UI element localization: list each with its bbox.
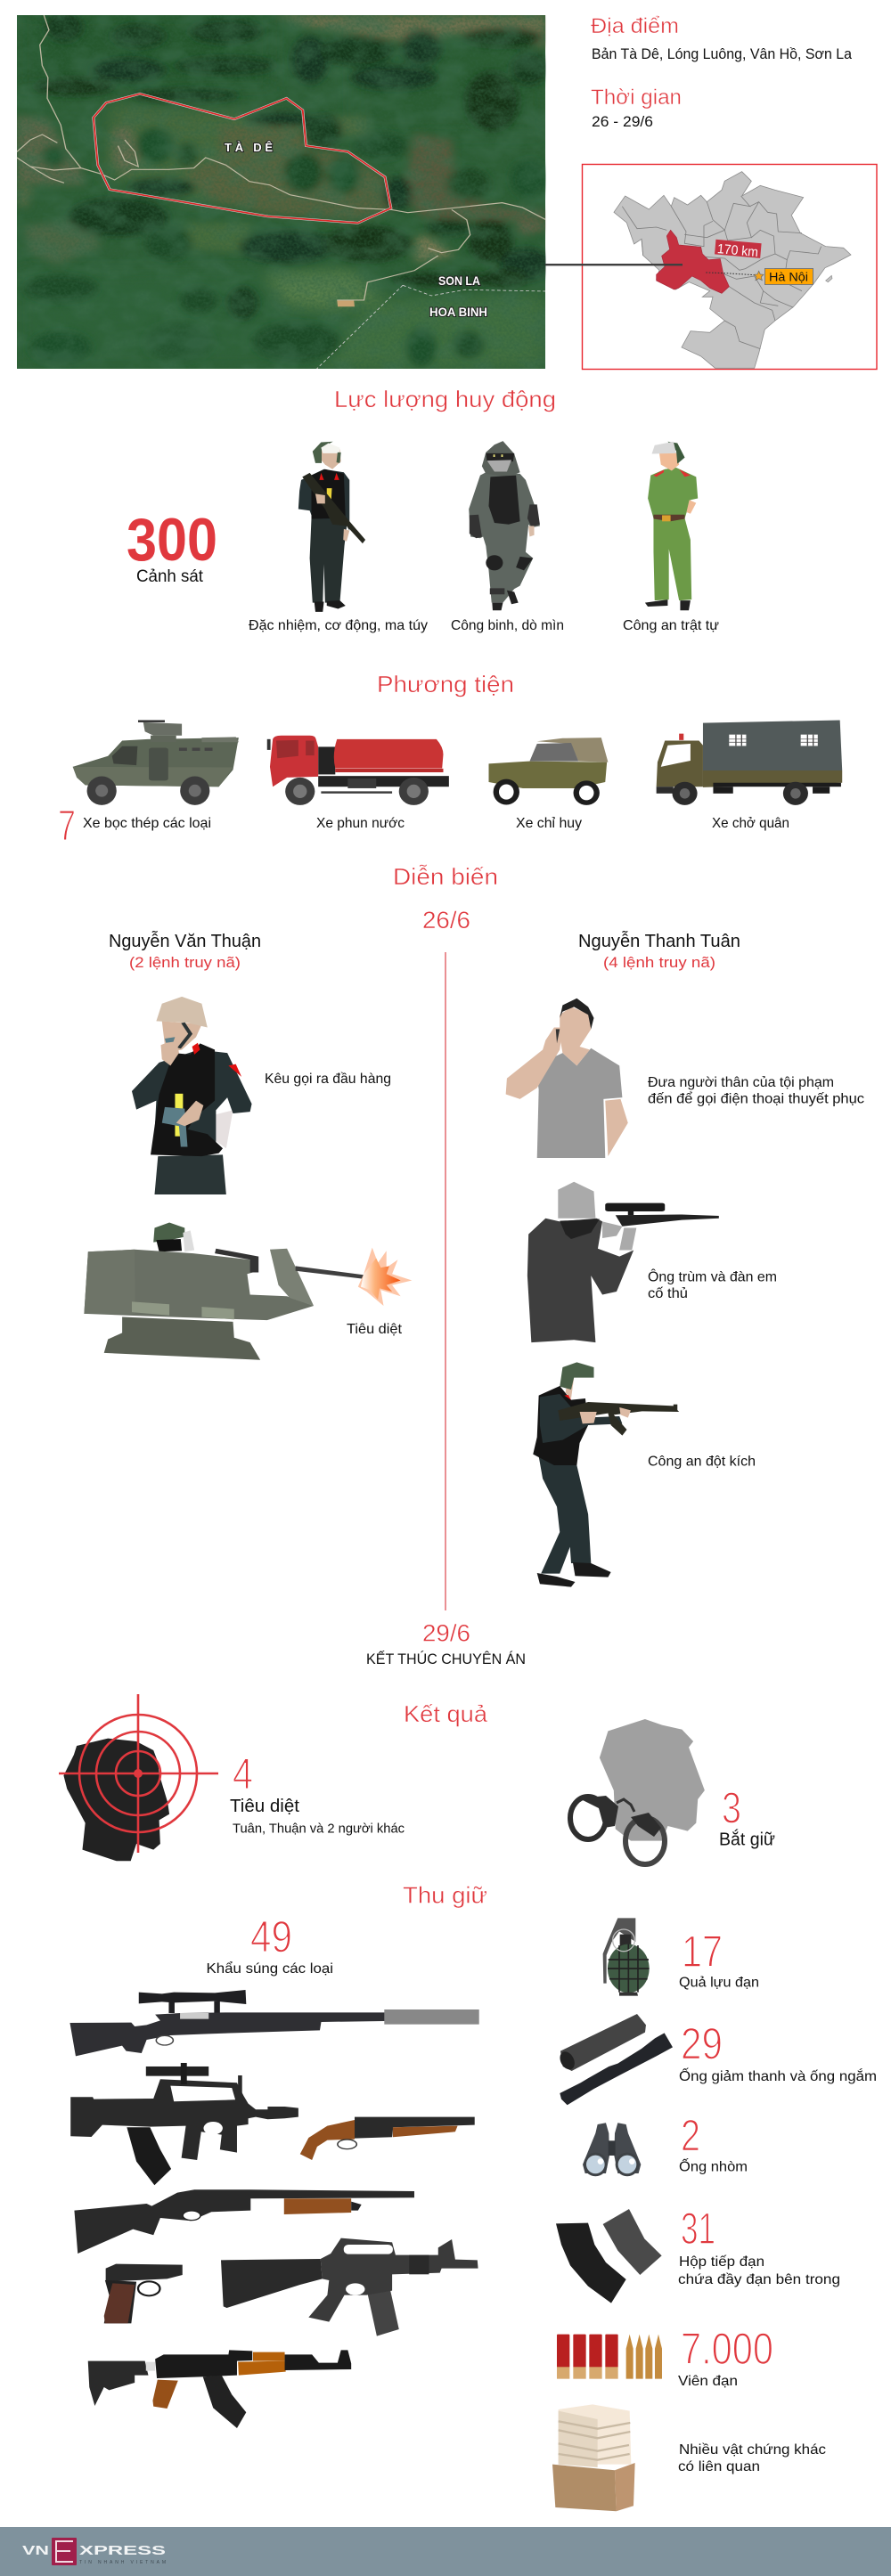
stat: 17 grenades: 17 [682,1927,723,1977]
logo: VnExpress: XPRESS [79,2543,166,2558]
icon: box of documents [552,2404,635,2511]
heading: kết quả: Kết quả [404,1700,488,1727]
icon: pistol [104,2264,183,2323]
icon: target on head [59,1694,218,1861]
icon: traffic police officer [645,442,698,610]
warrants left: (2 lệnh truy nã) [129,954,241,971]
text: names: Tuân, Thuận và 2 người khác [233,1821,405,1837]
label: raid: Công an đột kích [648,1454,756,1470]
label: other evidence: Nhiều vật chứng khác [679,2442,826,2458]
icon: man on phone [506,999,628,1158]
column head: Nguyễn Thanh Tuân: Nguyễn Thanh Tuân [578,931,740,951]
heading: địa điểm: Địa điểm [591,14,679,38]
panel: locator map [583,164,877,369]
icon: officer with megaphone [132,997,252,1194]
label: Tà Dê: TÀ DÊ [225,141,273,154]
label: grenades: Quả lựu đạn [679,1976,759,1990]
label: distance: 170 km [716,241,759,260]
logo: VnExpress: VN [22,2543,49,2558]
stat: 31: 31 [681,2204,715,2254]
label: Hà Nội: Hà Nội [769,269,808,283]
footer bar [0,2527,891,2576]
heading: lực lượng huy động: Lực lượng huy động [334,386,556,412]
label: public order police: Công an trật tự [623,618,719,633]
label: Sơn La: SON LA [438,274,480,288]
stat: 29: 29 [681,2018,723,2068]
label: call to surrender: Kêu gọi ra đầu hàng [265,1072,391,1087]
icon: armoured turret firing [84,1222,412,1360]
icon: AK rifle [88,2350,351,2428]
icon: pump shotgun [74,2189,414,2254]
heading: thời gian: Thời gian [591,86,682,110]
icon: armoured vehicle [73,720,239,805]
text: location: Bản Tà Dê, Lóng Luông, Vân Hồ, Sơn La [592,46,853,62]
date: start: 26/6 [422,907,470,933]
label: killed: Tiêu diệt [230,1797,299,1816]
stat: 300 police: 300 [127,506,217,574]
label: relatives called [648,1075,864,1107]
stat: 3 arrested: 3 [722,1785,741,1833]
text: dates: 26 - 29/6 [592,114,653,130]
label: cảnh sát: Cảnh sát [136,567,204,586]
text: case closed: KẾT THÚC CHUYÊN ÁN [366,1651,526,1667]
icon: hooded sniper [527,1182,719,1342]
label: magazines: Hộp tiếp đạn [679,2254,764,2270]
panel: satellite map of Tà Dê [17,12,551,369]
icon: silencer and scope [557,2014,673,2105]
stat: 2: 2 [681,2111,700,2161]
icon: sawed-off shotgun [300,2117,475,2160]
label: special forces: Đặc nhiệm, cơ động, ma túy [249,618,428,633]
column head: Nguyễn Văn Thuận: Nguyễn Văn Thuận [109,931,261,951]
label: command: Xe chỉ huy [516,816,582,831]
logo: VnExpress: TIN NHANH VIETNAM [79,2560,166,2565]
icon: magazines [556,2209,662,2303]
arrow: connector line [545,264,683,265]
label: rounds: Viên đạn [678,2374,738,2389]
icon: special forces officer [298,442,365,612]
label: holdout: Ông trùm và đàn em [648,1268,777,1285]
label: destroy: Tiêu diệt [347,1322,403,1337]
label: other evidence [678,2442,826,2474]
icon: raiding officer [533,1362,679,1587]
stat: 4 killed: 4 [233,1750,253,1798]
label: magazines: chứa đầy đạn bên trong [678,2272,840,2287]
icon: head with handcuffs [570,1719,705,1864]
label: magazines [678,2254,840,2287]
label: armoured: Xe bọc thép các loại [83,816,211,831]
icon: ammunition [557,2335,662,2379]
icon: grenade [603,1918,650,1996]
label: holdout [648,1268,777,1301]
label: holdout: cố thủ [648,1286,688,1301]
heading: diễn biến: Diễn biến [393,863,498,890]
icon: troop truck [657,720,842,805]
stat: 49 guns: 49 [250,1912,292,1961]
icon: bullpup rifle [70,2063,298,2185]
label: arrested: Bắt giữ [719,1830,775,1849]
icon: assault rifle M16 [221,2238,478,2336]
warrants right: (4 lệnh truy nã) [603,954,715,971]
label: troop: Xe chở quân [712,816,789,831]
date: end: 29/6 [422,1619,470,1646]
label: sappers: Công binh, dò mìn [451,618,564,633]
heading: phương tiện: Phương tiện [377,671,514,697]
icon: binoculars [583,2123,641,2176]
icon: command jeep [489,738,608,805]
icon: water cannon truck [267,736,449,805]
heading: thu giữ: Thu giữ [403,1881,487,1908]
icon: bomb disposal officer [469,441,540,610]
label: Hòa Bình: HOA BINH [429,306,487,319]
stat: 7000: 7.000 [681,2324,773,2374]
label: guns: Khẩu súng các loại [207,1961,333,1977]
label: other evidence: có liên quan [678,2459,760,2474]
label: relatives called: đến để gọi điện thoại thuyết phục [648,1091,864,1107]
label: water truck: Xe phun nước [316,816,405,831]
logo: VnExpress [22,2538,166,2565]
stat: 7 vehicles: 7 [58,803,76,850]
label: relatives called: Đưa người thân của tội phạm [648,1075,834,1090]
label: binoculars: Ống nhòm [679,2157,748,2175]
timeline line [445,952,446,1610]
label: silencers: Ống giảm thanh và ống ngắm [679,2067,877,2084]
icon: sniper rifle [69,1990,479,2056]
